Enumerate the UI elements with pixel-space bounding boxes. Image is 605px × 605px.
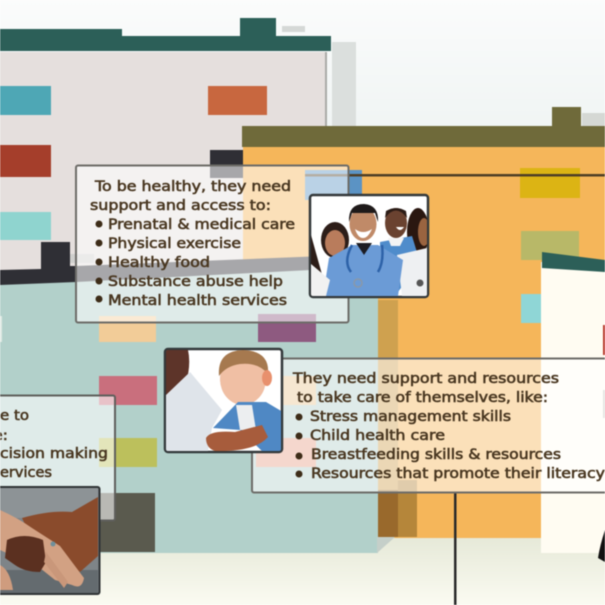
photo: medical staff: [310, 195, 430, 297]
panel: self care resources: [252, 358, 605, 492]
list: parent resources: Resources that promote their literacy: [311, 466, 605, 482]
sky background: [0, 0, 605, 300]
panel: decision making: [0, 396, 115, 520]
list: parent resources: Child health care: [310, 428, 445, 444]
list: health needs: Substance abuse help: [108, 274, 283, 290]
list: health needs: Healthy food: [108, 255, 210, 271]
connector line: [454, 493, 456, 605]
text: decision making list: [0, 408, 108, 481]
building: teal block: [0, 242, 395, 553]
heading: to be healthy: To be healthy, they need: [94, 179, 291, 195]
building: orange block: [242, 107, 605, 538]
heading: self care resources: They need support and resources: [292, 371, 559, 387]
panel: to be healthy: [76, 166, 348, 322]
list: health needs: Prenatal & medical care: [108, 217, 295, 233]
list: parent resources: Stress management skills: [310, 409, 511, 425]
heading: self care resources: to take care of themselves, like:: [297, 390, 548, 406]
heading: self care resources: [292, 371, 559, 406]
heading: to be healthy: support and access to:: [90, 198, 271, 214]
text: decision making list: cision making: [0, 446, 108, 462]
list: health needs: Physical exercise: [108, 236, 241, 252]
list: health needs: [96, 217, 295, 309]
list: parent resources: Breastfeeding skills & resources: [311, 447, 561, 463]
heading: to be healthy: [90, 179, 291, 214]
ground: [0, 537, 605, 605]
building: white block: [541, 252, 605, 562]
list: health needs: Mental health services: [108, 293, 287, 309]
text: decision making list: e to: [0, 408, 29, 424]
photo: doctor and child: [165, 349, 283, 452]
building: grey block: [0, 18, 356, 282]
text: decision making list: ervices: [0, 465, 52, 481]
list: parent resources: [296, 409, 605, 482]
photo: clasped hands: [0, 487, 100, 594]
